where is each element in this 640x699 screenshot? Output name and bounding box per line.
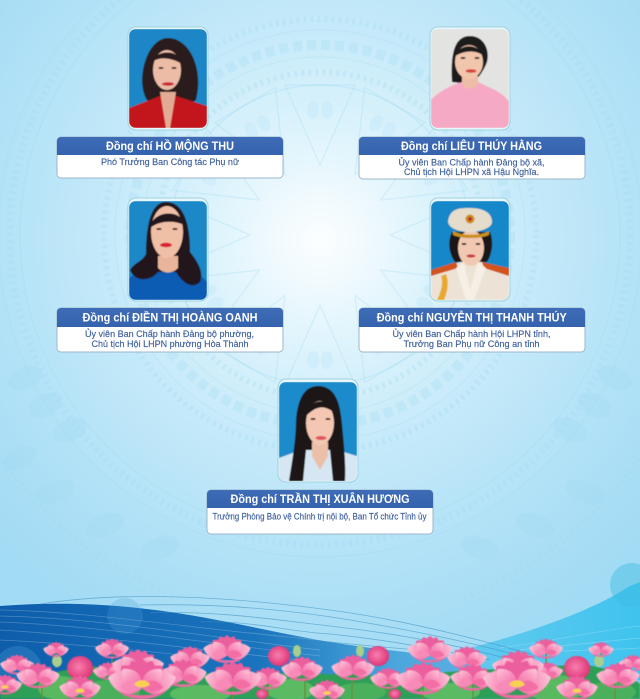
portrait: Điền Thị Hoàng Oanh — [128, 198, 208, 301]
flowers — [0, 634, 640, 699]
stems — [42, 650, 615, 699]
name box — [57, 137, 283, 178]
name box: Trưởng Phòng Bảo vệ Chính trị nội bộ, Ban Tổ chức Tỉnh ủy — [212, 512, 427, 522]
name box: Đồng chí TRẦN THỊ XUÂN HƯƠNG — [230, 491, 410, 506]
card: Nguyễn Thị Thanh Thúy — [359, 198, 585, 352]
name box: Chủ tịch Hội LHPN phường Hòa Thành — [92, 339, 248, 349]
name box: Chủ tịch Hội LHPN xã Hậu Nghĩa. — [404, 167, 539, 177]
name box: Ủy viên Ban Chấp hành Đảng bộ phường, — [85, 328, 254, 339]
buds — [52, 645, 604, 699]
name box: Ủy viên Ban Chấp hành Hội LHPN tỉnh, — [392, 328, 550, 339]
bird motifs — [0, 360, 636, 565]
name box — [207, 490, 433, 534]
drum motif — [101, 16, 539, 450]
name box — [57, 308, 283, 352]
card: Trần Thị Xuân Hương — [207, 379, 433, 534]
portrait: Trần Thị Xuân Hương — [278, 379, 358, 482]
name box: Đồng chí HỒ MỘNG THU — [106, 138, 234, 153]
name box: Đồng chí NGUYỄN THỊ THANH THÚY — [377, 310, 567, 324]
green leaves — [0, 664, 640, 699]
name box: Ủy viên Ban Chấp hành Đảng bộ xã, — [398, 156, 544, 168]
name box: Trưởng Ban Phụ nữ Công an tỉnh — [404, 339, 540, 349]
card: Điền Thị Hoàng Oanh — [57, 198, 283, 352]
name box — [359, 308, 585, 352]
lotus field — [0, 634, 640, 699]
portrait: Nguyễn Thị Thanh Thúy — [430, 198, 510, 301]
card: Liêu Thúy Hằng — [359, 27, 585, 179]
card: Hồ Mộng Thu — [57, 27, 283, 178]
portrait: Hồ Mộng Thu — [128, 27, 208, 130]
name box: Phó Trưởng Ban Công tác Phụ nữ — [101, 157, 239, 167]
bottom waves — [0, 563, 640, 699]
name box: Đồng chí ĐIỀN THỊ HOÀNG OANH — [82, 310, 258, 324]
name box: Đồng chí LIÊU THÚY HẰNG — [401, 138, 542, 153]
name box — [359, 137, 585, 179]
portrait: Liêu Thúy Hằng — [430, 27, 510, 130]
